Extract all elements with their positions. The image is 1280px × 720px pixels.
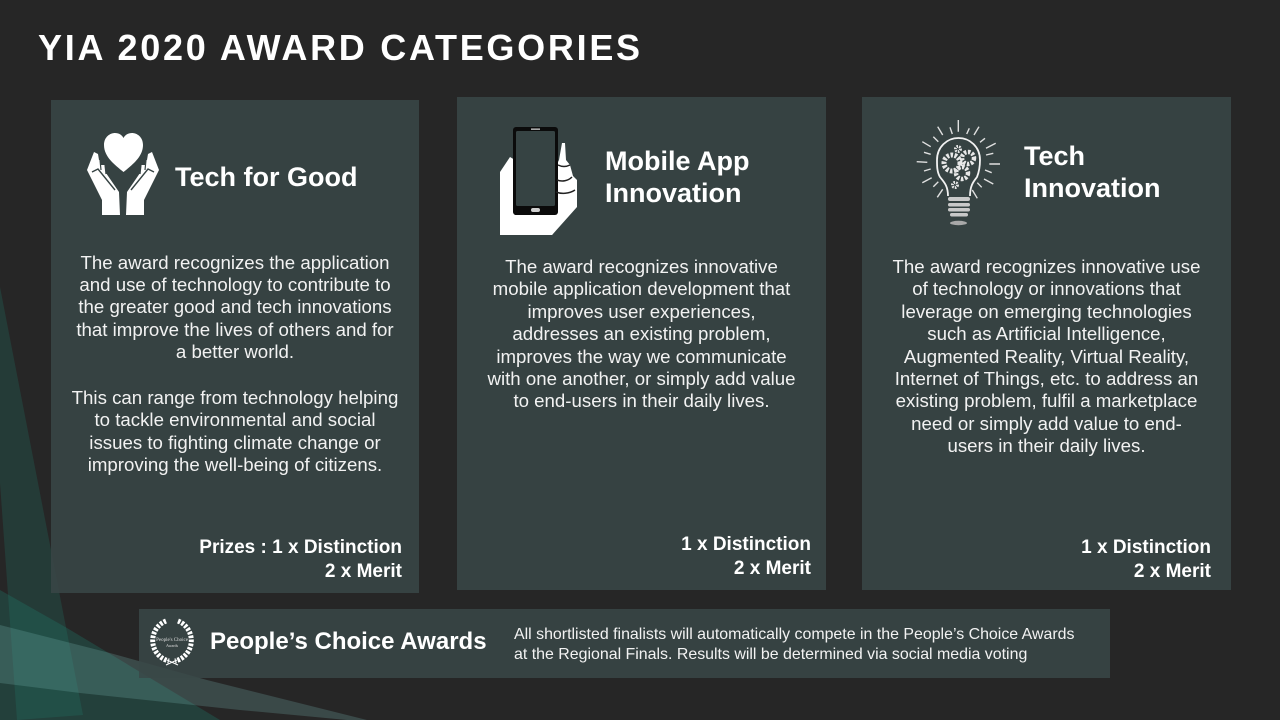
prizes: Prizes : 1 x Distinction [199, 537, 402, 558]
heading: Innovation [1024, 173, 1160, 203]
panel: Tech for Good [51, 100, 419, 593]
description [487, 256, 796, 411]
panel: People's Choice Awards [139, 609, 1110, 678]
description: Internet of Things, etc. to address an [895, 368, 1198, 389]
prizes [1081, 537, 1211, 582]
description: and use of technology to contribute to [79, 274, 391, 295]
description: need or simply add value to end- [911, 413, 1182, 434]
description: scope: This can range from technology helping [72, 387, 398, 408]
description: scope [72, 387, 398, 475]
description: scope: issues to fighting climate change or [89, 432, 381, 453]
panel: Tech Innovation [862, 97, 1231, 590]
prizes: 2 x Merit [1134, 560, 1211, 582]
description: with one another, or simply add value [487, 368, 796, 389]
heading: Mobile App [605, 146, 749, 176]
prizes: 2 x Merit [734, 558, 811, 578]
description: at the Regional Finals. Results will be determined via social media voting [514, 646, 1027, 663]
heading [605, 146, 749, 208]
prizes: 1 x Distinction [1081, 537, 1211, 558]
description: leverage on emerging technologies [901, 301, 1192, 322]
description: existing problem, fulfil a marketplace [896, 390, 1197, 411]
description: users in their daily lives. [947, 435, 1146, 456]
icon: hands holding heart [87, 133, 159, 215]
description: a better world. [176, 341, 294, 362]
description: improves user experiences, [527, 301, 756, 322]
description: improves the way we communicate [496, 346, 787, 367]
description: All shortlisted finalists will automatically compete in the People’s Choice Awards [514, 626, 1074, 643]
heading: Innovation [605, 178, 742, 208]
icon: laurel wreath: Awards [166, 643, 178, 648]
description: The award recognizes innovative use [892, 256, 1200, 277]
prizes: 1 x Distinction [681, 534, 811, 555]
heading: People’s Choice Awards [210, 628, 487, 655]
description: scope: improving the well-being of citizens. [88, 454, 382, 475]
prizes: 2 x Merit [325, 560, 402, 582]
title: YIA 2020 AWARD CATEGORIES [38, 27, 643, 68]
description: of technology or innovations that [912, 278, 1181, 299]
description: to end-users in their daily lives. [513, 390, 770, 411]
description: that improve the lives of others and for [76, 319, 394, 340]
description: The award recognizes innovative [505, 256, 778, 277]
description [76, 252, 394, 362]
heading: Tech [1024, 141, 1085, 171]
icon: laurel wreath [150, 618, 194, 666]
description: Augmented Reality, Virtual Reality, [904, 346, 1189, 367]
description: such as Artificial Intelligence, [927, 323, 1166, 344]
description [514, 626, 1074, 663]
prizes [199, 537, 402, 582]
description: addresses an existing problem, [512, 323, 771, 344]
description: scope: to tackle environmental and social [94, 409, 376, 430]
panel: Mobile App Innovation [457, 97, 826, 590]
heading: Tech for Good [175, 162, 358, 192]
description: mobile application development that [493, 278, 790, 299]
icon: light bulb with gears [916, 120, 1000, 226]
icon: laurel wreath: People's Choice [156, 638, 189, 643]
description: The award recognizes the application [80, 252, 390, 272]
description [892, 256, 1200, 456]
icon: hand holding phone [500, 127, 577, 235]
prizes [681, 534, 811, 578]
description: the greater good and tech innovations [78, 296, 392, 317]
heading [1024, 141, 1160, 203]
